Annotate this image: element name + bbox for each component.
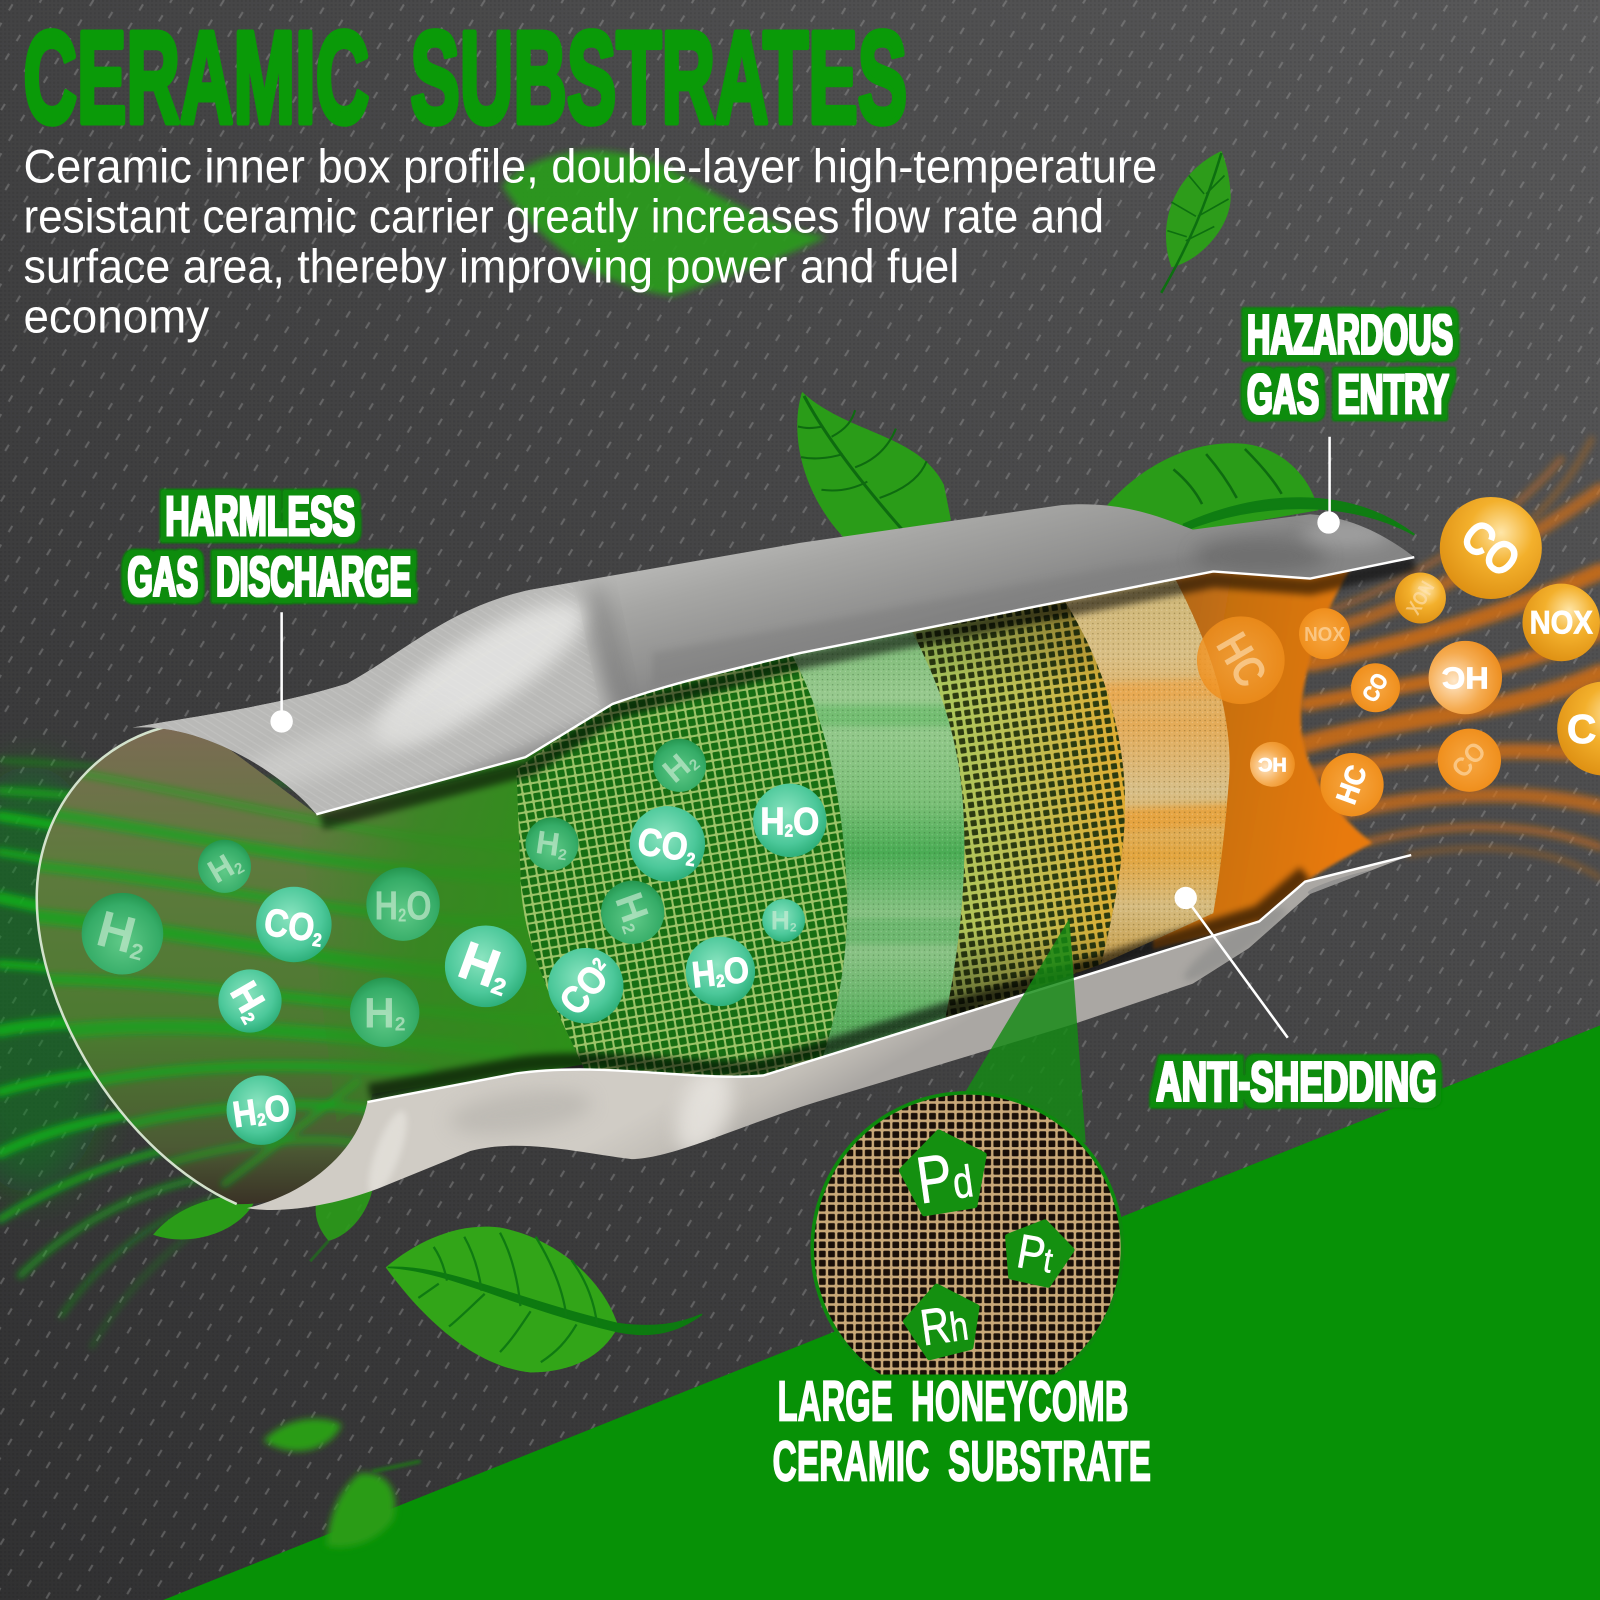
rear honeycomb section	[898, 602, 1125, 1020]
molecule H2O: O	[406, 882, 432, 928]
inner tube green glow	[296, 735, 602, 1122]
catalytic converter metal shell	[102, 504, 1414, 1210]
molecule H2O: 2	[398, 904, 406, 925]
description text: resistant ceramic carrier greatly increases flow rate and	[23, 191, 1104, 243]
anti-shedding yellow band	[1061, 578, 1235, 964]
shadows under shells	[321, 563, 1414, 821]
molecule H2	[350, 978, 419, 1047]
molecule H2	[653, 739, 706, 792]
molecule H2: H	[534, 823, 562, 863]
molecule CO	[1351, 663, 1400, 712]
molecule CO: CO	[1357, 669, 1393, 706]
molecule HC: HC	[1207, 624, 1277, 695]
molecule H2	[82, 893, 163, 974]
molecule C cut off at edge: C	[1567, 706, 1596, 752]
description text	[23, 141, 1157, 343]
molecule CO2	[630, 806, 705, 882]
callout: harmless gas discharge	[128, 485, 411, 733]
orange haze and streams entering pipe	[1302, 439, 1600, 878]
callout: harmless gas discharge: GAS DISCHARGE	[128, 545, 411, 608]
molecule CO	[1438, 729, 1501, 792]
callout: hazardous gas entry: HAZARDOUS	[1247, 303, 1453, 366]
title: CERAMIC SUBSTRATES	[23, 4, 907, 150]
molecule H2O	[753, 784, 827, 857]
molecule H2: H	[201, 846, 240, 890]
callout: harmless gas discharge: HARMLESS	[165, 485, 355, 548]
mouth interior	[37, 722, 571, 1204]
molecule HC: HC	[1442, 660, 1489, 694]
molecule H2O: 2	[256, 1109, 267, 1130]
molecule H2O	[366, 867, 440, 941]
element badge Pt: Pt	[1013, 1225, 1058, 1284]
substrate caption: CERAMIC SUBSTRATE	[772, 1430, 1151, 1493]
molecule H2: H	[451, 931, 507, 999]
molecule HC	[1429, 641, 1502, 714]
icon: leaf above pipe left	[797, 392, 951, 541]
molecule HC: HC	[1258, 753, 1287, 775]
molecule H2	[198, 840, 251, 893]
small leaves under pipe mouth	[153, 1184, 373, 1261]
molecule H2: 2	[790, 921, 797, 935]
molecule CO2: CO	[552, 951, 622, 1023]
molecule CO2: CO	[635, 820, 698, 871]
blurred leaf behind description	[502, 151, 827, 296]
molecule H2: H	[606, 887, 656, 928]
molecule H2	[218, 969, 282, 1033]
callout: anti-shedding: ANTI-SHEDDING	[1156, 1050, 1437, 1113]
molecule H2O	[227, 1076, 296, 1145]
glass mouth rim	[37, 722, 237, 1204]
molecule H2: 2	[237, 1009, 259, 1027]
top shell	[102, 504, 1414, 837]
molecule H2O: O	[722, 949, 751, 992]
green ceramic band	[786, 628, 969, 1061]
molecule NOX: NOX	[1401, 577, 1438, 618]
callout wedge	[953, 918, 1086, 1143]
molecule H2: H	[91, 900, 142, 964]
bottom shell	[247, 855, 1411, 1210]
green gas streams leaving pipe	[0, 760, 367, 1347]
molecule CO2: 2	[685, 848, 696, 870]
molecule HC: HC	[1331, 761, 1374, 808]
hazardous gas molecules	[1197, 497, 1600, 816]
molecule CO2: 2	[311, 929, 323, 951]
molecule H2: 2	[618, 921, 640, 937]
harmless gas molecules	[82, 739, 827, 1145]
molecule H2: 2	[488, 972, 509, 1001]
molecule CO2: CO	[261, 901, 325, 952]
molecule H2	[601, 881, 664, 944]
description text: economy	[23, 291, 210, 343]
molecule HC	[1250, 742, 1295, 787]
molecule H2: 2	[127, 938, 146, 966]
molecule H2O	[686, 937, 755, 1006]
molecule H2: H	[364, 990, 395, 1038]
big leaf	[386, 1227, 702, 1372]
front honeycomb section	[516, 653, 847, 1080]
icon: leaf above pipe right with stem	[1107, 443, 1414, 536]
molecule CO: CO	[1451, 509, 1530, 587]
molecule CO2	[256, 887, 332, 962]
callout: hazardous gas entry	[1247, 303, 1453, 534]
molecule H2O: O	[262, 1087, 292, 1131]
molecule H2: H	[771, 906, 790, 936]
substrate caption	[772, 1369, 1151, 1493]
molecule NOX	[1522, 584, 1600, 661]
molecule H2O: H	[760, 801, 788, 844]
element badge Pt	[1008, 1222, 1071, 1285]
blurred falling leaves	[263, 1419, 420, 1547]
molecule C cut off at edge	[1557, 682, 1600, 776]
orange hazardous gas chamber	[1153, 559, 1372, 949]
pipe interior and substrate	[0, 559, 1414, 1235]
molecule H2: 2	[557, 846, 568, 864]
icon: leaf top right	[1161, 151, 1231, 293]
magnified honeycomb circle	[812, 1093, 1122, 1403]
molecule H2: 2	[395, 1014, 406, 1036]
molecule H2: H	[655, 746, 697, 790]
molecule NOX	[1299, 608, 1350, 659]
molecule H2O: 2	[715, 970, 726, 991]
description text: Ceramic inner box profile, double-layer high-temperature	[23, 141, 1157, 193]
element badge Rh: Rh	[917, 1293, 971, 1356]
molecule H2O: H	[374, 882, 404, 928]
molecule H2	[445, 926, 527, 1007]
molecule H2O: O	[793, 801, 819, 844]
molecule H2: 2	[686, 756, 704, 774]
molecule H2	[762, 899, 805, 942]
molecule H2O: H	[230, 1091, 262, 1135]
green diagonal corner panel	[163, 1026, 1600, 1600]
molecule CO: CO	[1445, 736, 1492, 783]
substrate caption: LARGE HONEYCOMB	[778, 1369, 1129, 1432]
molecule H2O: H	[690, 952, 721, 996]
description text: surface area, thereby improving power and fuel	[23, 241, 959, 293]
molecule H2O: 2	[785, 821, 793, 841]
molecule H2: H	[221, 974, 273, 1020]
green streams inside mouth	[38, 768, 483, 1190]
element badge Pd: Pd	[912, 1137, 977, 1218]
callout: hazardous gas entry: GAS ENTRY	[1247, 362, 1449, 425]
molecule HC	[1320, 753, 1384, 816]
molecule CO2: 2	[588, 953, 609, 974]
molecule NOX: NOX	[1304, 624, 1345, 646]
molecule H2: 2	[232, 859, 248, 878]
molecule H2	[526, 817, 579, 870]
callout: anti-shedding	[1156, 887, 1437, 1113]
molecule NOX: NOX	[1530, 604, 1593, 641]
